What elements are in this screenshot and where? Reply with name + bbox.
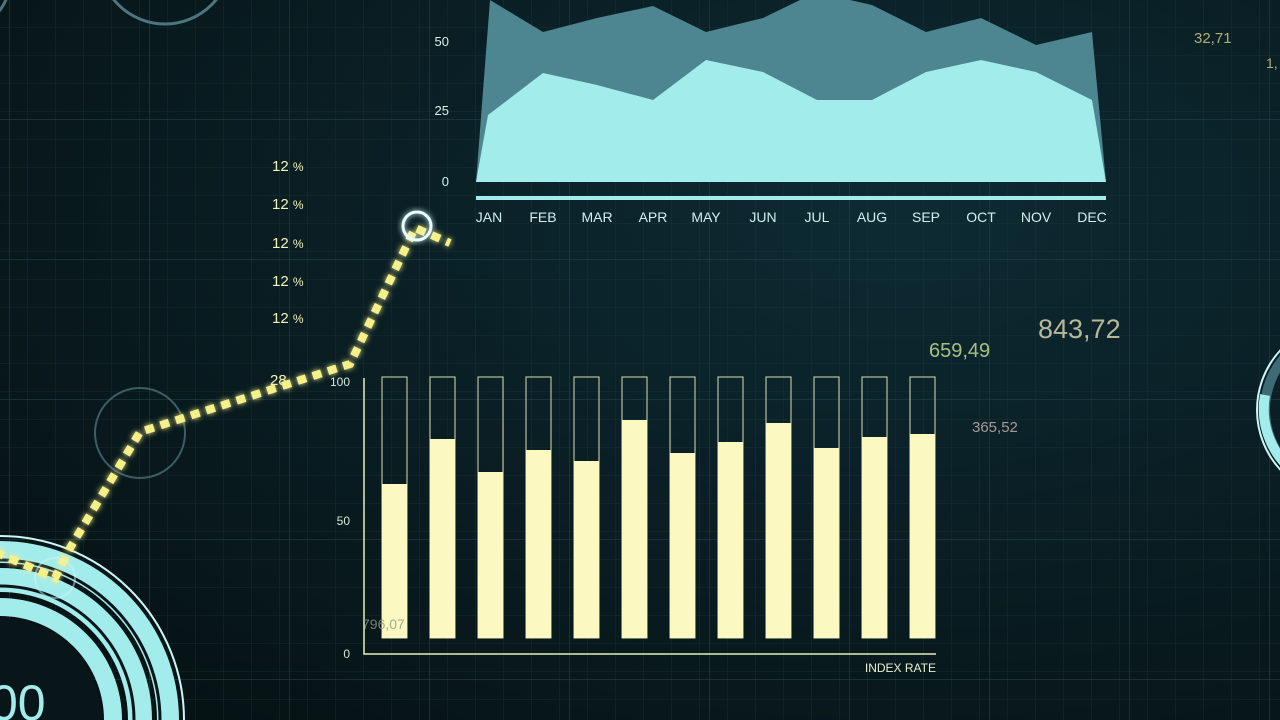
number labels bbox=[929, 30, 1278, 436]
ring gauge right edge bbox=[1257, 322, 1280, 498]
percent labels: 12 % bbox=[272, 273, 304, 290]
circle: top-left decoration bbox=[0, 0, 231, 30]
month labels: JUN bbox=[749, 209, 777, 225]
area: light series bbox=[476, 60, 1106, 182]
percent labels: 12 % bbox=[272, 235, 304, 252]
month labels: OCT bbox=[966, 209, 996, 225]
area: dark series bbox=[476, 0, 1106, 182]
y labels: 0 bbox=[442, 174, 449, 189]
bar chart: 100 bbox=[330, 375, 350, 389]
bar chart bbox=[330, 375, 936, 675]
ring gauge bottom-left bbox=[0, 536, 184, 720]
percent labels: 12 % bbox=[272, 196, 304, 213]
percent labels: 12 % bbox=[272, 310, 304, 327]
number labels: 365,52 bbox=[972, 419, 1018, 436]
bar chart: 0 bbox=[343, 647, 350, 661]
month labels: JUL bbox=[805, 209, 830, 225]
percent labels: 12 % bbox=[272, 158, 304, 175]
bar chart: 796,07 bbox=[362, 616, 405, 632]
number labels: 32,71 bbox=[1194, 30, 1232, 47]
dashed line chart bbox=[0, 228, 450, 578]
area chart bbox=[435, 0, 1107, 225]
month labels: MAY bbox=[691, 209, 721, 225]
month labels: DEC bbox=[1077, 209, 1107, 225]
month labels: AUG bbox=[857, 209, 887, 225]
month labels bbox=[476, 209, 1107, 225]
number labels: 1, bbox=[1266, 55, 1278, 71]
bar chart: 50 bbox=[337, 514, 350, 528]
number labels: 843,72 bbox=[1038, 314, 1121, 344]
month labels: NOV bbox=[1021, 209, 1052, 225]
axis bar bbox=[476, 196, 1106, 200]
circle: mid-left marker bbox=[95, 388, 185, 478]
percent labels bbox=[270, 158, 304, 389]
month labels: SEP bbox=[912, 209, 940, 225]
percent labels: 28 bbox=[270, 372, 287, 389]
month labels: MAR bbox=[581, 209, 613, 225]
bars bbox=[382, 377, 935, 638]
month labels: FEB bbox=[529, 209, 557, 225]
x label: INDEX RATE bbox=[865, 661, 936, 675]
month labels: JAN bbox=[476, 209, 502, 225]
number labels: 659,49 bbox=[929, 340, 990, 362]
y labels bbox=[435, 34, 449, 189]
month labels: APR bbox=[639, 209, 667, 225]
y labels: 50 bbox=[435, 34, 449, 49]
point markers bbox=[35, 212, 431, 598]
y labels: 25 bbox=[435, 103, 449, 118]
axes bbox=[364, 378, 936, 654]
